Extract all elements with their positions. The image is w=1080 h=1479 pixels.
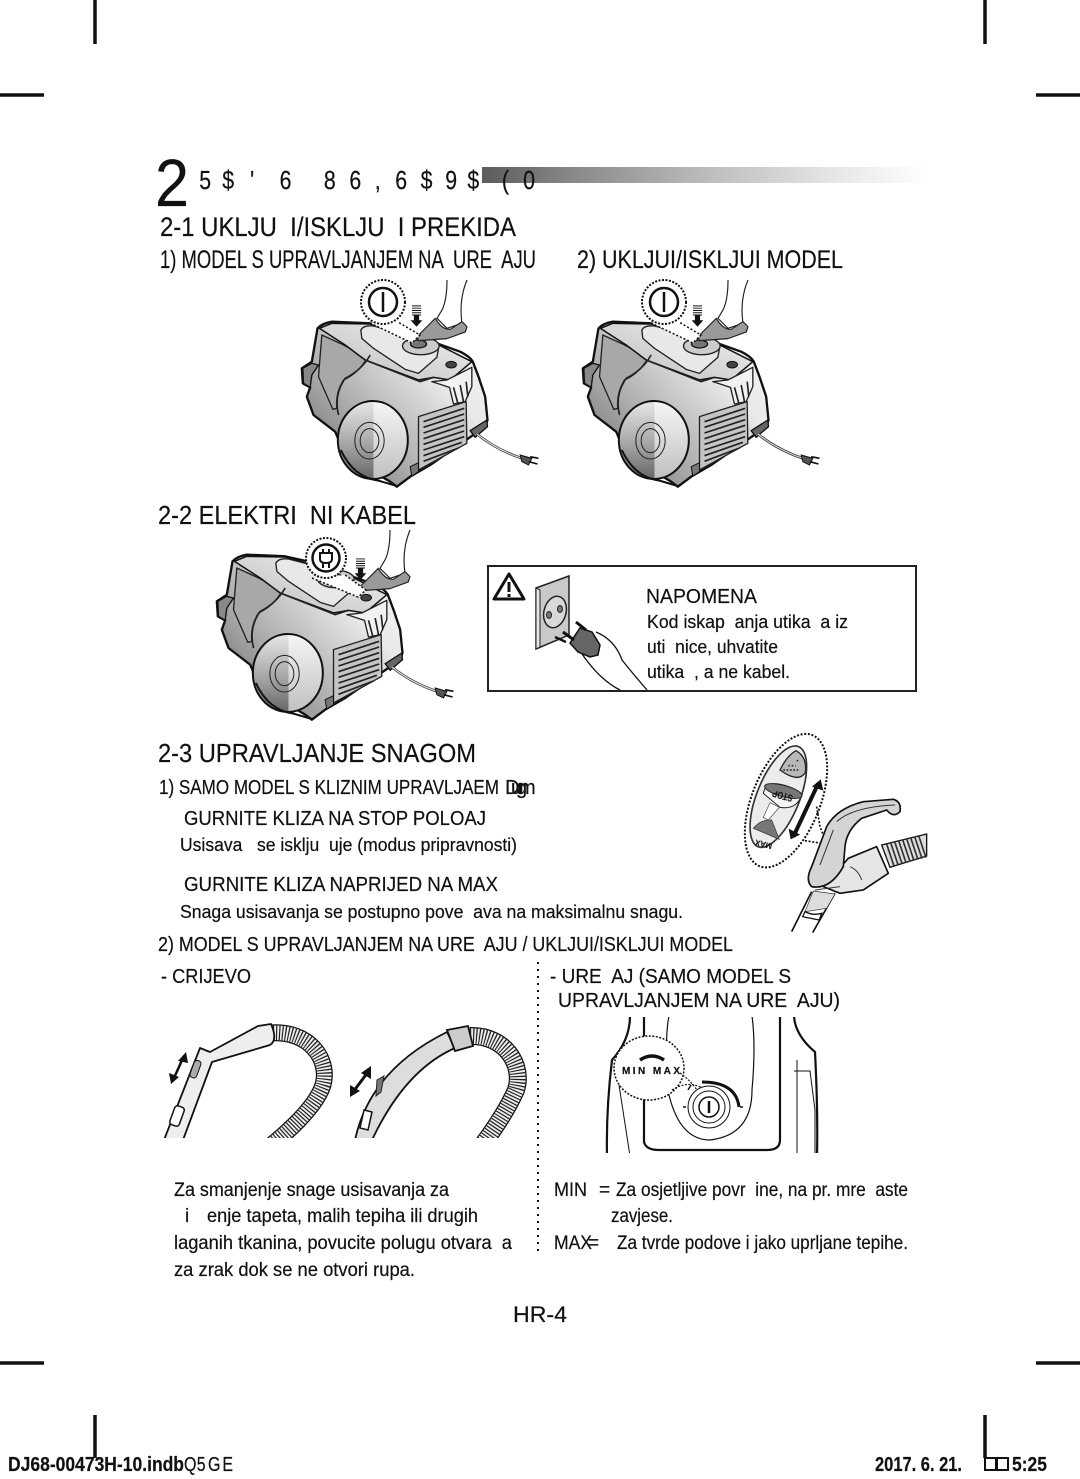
text: min and max description: =: [599, 1180, 610, 1201]
text: min and max description: MIN: [554, 1180, 587, 1201]
text: hose description: Za smanjenje snage usisavanja za: [174, 1180, 449, 1201]
text: slider max: GURNITE KLIZA NAPRIJED NA MAX: [184, 874, 498, 896]
text: model line: 2) MODEL S UPRAVLJANJEM NA URE AJU / UKLJUI/ISKLJUI MODEL: [158, 934, 733, 956]
title: 5$'686,6$9$(0: [199, 166, 535, 196]
arrow left: [169, 1052, 188, 1084]
callout: min max bubble: [614, 1036, 702, 1100]
illustration: device dial: [607, 1016, 817, 1156]
icon: foot: [360, 530, 410, 591]
icon: socket and hand with plug: [536, 576, 647, 690]
text: hose description: laganih tkanina, povucite polugu otvara a: [174, 1233, 512, 1254]
text: min and max description: Za osjetljive povr ine, na pr. mre aste: [616, 1180, 908, 1201]
text: slider model heading: Dugm: [505, 777, 536, 799]
page number: HR-4: [513, 1302, 567, 1327]
note title: NAPOMENA: [646, 586, 758, 608]
illustration: vacuum with power button, model 2: [583, 280, 820, 487]
hose left: [164, 1024, 324, 1148]
note text: [647, 612, 848, 682]
text: hose description: enje tapeta, malih tepiha ili drugih: [207, 1206, 478, 1227]
label: device: UPRAVLJANJEM NA URE AJU): [558, 990, 840, 1012]
text: slider stop description: Usisava se isklju uje (modus pripravnosti): [180, 835, 517, 855]
icon: foot: [417, 280, 467, 341]
title: [155, 146, 535, 221]
text: hose description: [174, 1180, 512, 1281]
icon: foot: [698, 280, 748, 341]
heading: 2-3: 2-3 UPRAVLJANJE SNAGOM: [158, 738, 476, 768]
heading: 2-2: 2-2 ELEKTRI NI KABEL: [158, 500, 416, 530]
text: min and max description: zavjese.: [611, 1206, 673, 1227]
illustration: hose handle with slider: [728, 722, 927, 933]
title: 2: [155, 146, 189, 221]
note text: utika , a ne kabel.: [647, 662, 790, 682]
illustration: hose handle with slider: STOP: [771, 787, 794, 803]
illustration: vacuum with power button, model 1: [302, 280, 538, 487]
callout: min max bubble: MIN MAX: [622, 1066, 680, 1077]
footer left: DJ68-00473H-10.indb: [8, 1454, 184, 1476]
text: min and max description: Za tvrde podove i jako uprljane tepihe.: [617, 1233, 908, 1254]
text: slider stop: GURNITE KLIZA NA STOP POLOAJ: [184, 808, 486, 830]
illustration: hose versions: [164, 1024, 518, 1148]
subheading: model 1: 1) MODEL S UPRAVLJANJEM NA URE AJU: [160, 246, 536, 274]
footer left: Q5GE: [184, 1453, 233, 1475]
illustration: vacuum with cord button: [217, 530, 454, 720]
heading: 2-1: 2-1 UKLJU I/ISKLJU I PREKIDA: [160, 212, 516, 242]
label: device: - URE AJ (SAMO MODEL S: [550, 966, 791, 988]
illustration: hose handle with slider: MAX: [753, 837, 773, 851]
text: slider model heading: 1) SAMO MODEL S KLIZNIM UPRAVLJAEM: [159, 777, 499, 799]
title gradient bar: [482, 167, 930, 183]
text: min and max description: =: [588, 1233, 599, 1254]
icon: warning triangle: [494, 574, 524, 599]
text: hose description: za zrak dok se ne otvori rupa.: [174, 1260, 415, 1281]
note text: Kod iskap anja utika a iz: [647, 612, 848, 632]
note text: uti nice, uhvatite: [647, 637, 778, 657]
label: device: [550, 966, 840, 1012]
text: min and max description: MAX: [554, 1233, 592, 1254]
footer right: 5:25: [1012, 1454, 1047, 1476]
subheading: model 2: 2) UKLJUI/ISKLJUI MODEL: [577, 246, 843, 274]
footer right: [875, 1454, 1047, 1476]
text: slider max description: Snaga usisavanja se postupno pove ava na maksimalnu snagu.: [180, 902, 683, 922]
hose right: [355, 1026, 518, 1148]
footer right: 2017. 6. 21.: [875, 1454, 962, 1476]
text: min and max description: [554, 1180, 908, 1254]
arrow right: [350, 1066, 371, 1097]
text: hose description: i: [185, 1206, 189, 1227]
divider: [537, 962, 539, 1253]
callout: note: [488, 566, 916, 691]
label: hose: - CRIJEVO: [161, 966, 251, 988]
